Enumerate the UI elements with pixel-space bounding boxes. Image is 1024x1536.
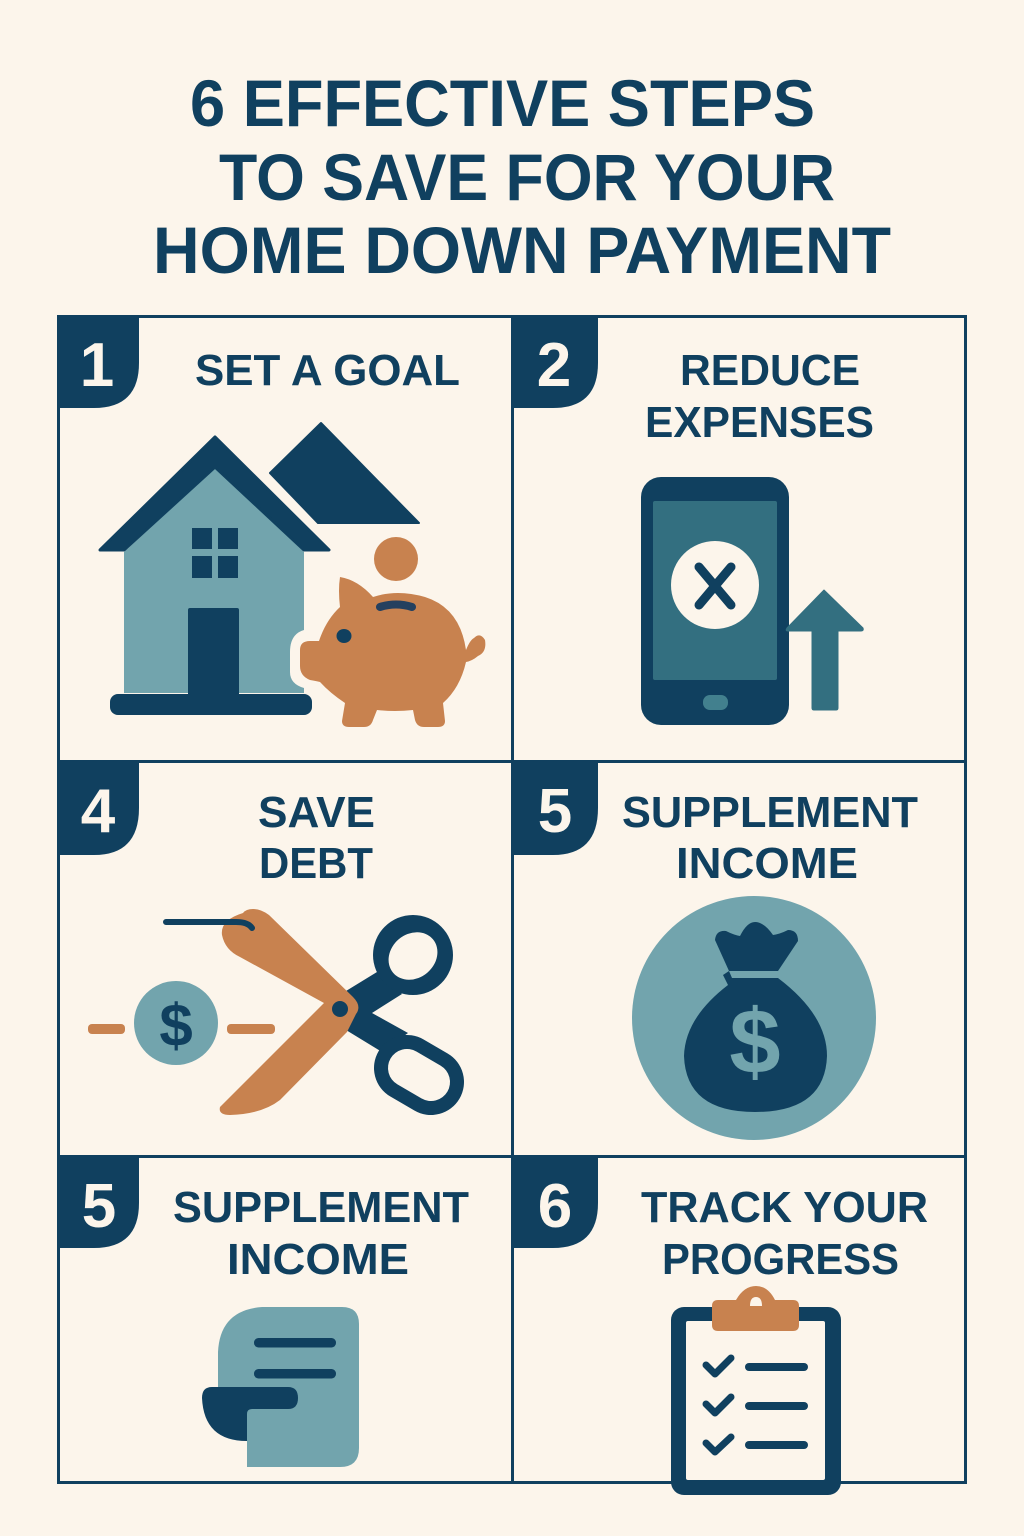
heading: save debt: [258, 788, 375, 888]
title: HOME DOWN PAYMENT: [153, 213, 891, 287]
heading: track your progress: PROGRESS: [662, 1235, 899, 1284]
title: [153, 66, 891, 287]
badge 1: [58, 316, 139, 408]
heading: save debt: SAVE: [258, 788, 375, 837]
heading: reduce expenses: EXPENSES: [645, 398, 874, 447]
icon: house and piggy bank: [100, 423, 485, 727]
badge 6: 6: [538, 1172, 572, 1241]
panel: step 5 supplement income with money bag: [512, 761, 918, 1140]
heading: set a goal: SET A GOAL: [195, 346, 460, 395]
badge 4: 4: [81, 777, 116, 846]
badge 5: [58, 1156, 139, 1248]
heading: track your progress: TRACK YOUR: [641, 1183, 928, 1232]
heading: supplement income: INCOME: [227, 1235, 409, 1284]
icon: clipboard checklist: [671, 1286, 841, 1495]
heading: supplement income: [173, 1183, 469, 1284]
icon: phone with x and arrow: [641, 477, 863, 725]
icon: document scroll: [202, 1307, 359, 1467]
panel: step 4 save debt: [58, 761, 453, 1115]
icon: scissors cutting dollar coin: $: [159, 992, 193, 1059]
badge 5: [512, 761, 598, 855]
panel: step 2 reduce expenses: [512, 316, 874, 725]
heading: reduce expenses: REDUCE: [680, 346, 860, 395]
badge 5: 5: [82, 1172, 116, 1241]
heading: supplement income: SUPPLEMENT: [622, 788, 918, 837]
title: TO SAVE FOR YOUR: [219, 140, 835, 214]
badge 2: [512, 316, 598, 408]
badge 6: [512, 1156, 598, 1248]
heading: supplement income: INCOME: [676, 839, 858, 888]
heading: track your progress: [641, 1183, 928, 1284]
heading: save debt: DEBT: [259, 839, 373, 888]
icon: money bag: $: [729, 991, 781, 1093]
heading: reduce expenses: [645, 346, 874, 447]
heading: supplement income: SUPPLEMENT: [173, 1183, 469, 1232]
badge 4: [58, 761, 139, 855]
badge 2: 2: [537, 331, 571, 400]
panel: step 5 supplement income with document: [58, 1156, 469, 1467]
panel: step 1 set a goal: [58, 316, 485, 727]
title: 6 EFFECTIVE STEPS: [190, 66, 815, 140]
grid frame: [58, 316, 966, 1482]
panel: step 6 track your progress: [512, 1156, 928, 1495]
icon: money bag: [632, 896, 876, 1140]
icon: scissors cutting dollar coin: [88, 909, 453, 1115]
badge 1: 1: [80, 331, 114, 400]
badge 5: 5: [538, 777, 572, 846]
heading: supplement income: [622, 788, 918, 888]
